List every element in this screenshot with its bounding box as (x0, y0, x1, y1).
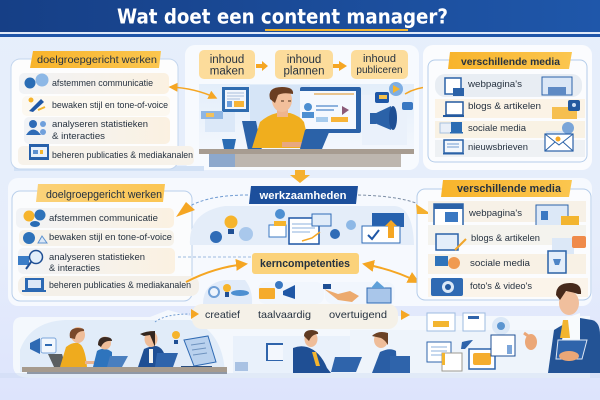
list row: webpagina's (435, 74, 582, 97)
people: team at table (48, 327, 216, 368)
skills pill (191, 304, 410, 329)
desk (199, 149, 414, 167)
monitor (300, 87, 361, 133)
arrow: two-way kerncompetenties and media (364, 264, 418, 282)
list row: afstemmen communicatie (19, 73, 169, 94)
arrow to media (405, 87, 437, 94)
heading: doelgroepgericht werken (36, 184, 165, 202)
panel: workflow and manager scene (185, 45, 437, 170)
list row: foto's & video's: foto's & video's (470, 281, 532, 292)
list row: foto's & video's (428, 278, 588, 297)
panel: verschillende media (top) (423, 45, 592, 170)
step: inhoud plannen: inhoud (287, 54, 321, 66)
arrow: two-way between list and scene (170, 87, 216, 98)
list row: nieuwsbrieven: nieuwsbrieven (468, 142, 528, 153)
arrow (333, 61, 347, 71)
panel: doelgroepgericht werken (top) (11, 51, 204, 171)
list row: blogs (428, 225, 586, 258)
arrow (256, 61, 268, 71)
heading: werkzaamheden (249, 186, 358, 204)
icons: kerncompetenties illustration (203, 280, 395, 304)
list row: sociale media (428, 251, 586, 274)
list row: bewaken stijl: bewaken stijl en tone-of-voice (49, 232, 172, 243)
skills pill: overtuigend (329, 309, 387, 321)
panel: middle section background (8, 178, 592, 306)
step: inhoud maken: inhoud (210, 54, 244, 66)
list row: sociale media (435, 121, 585, 138)
heading: werkzaamheden: werkzaamheden (258, 190, 347, 202)
cup (222, 139, 236, 149)
heading: verschillende media: verschillende media (457, 183, 562, 195)
list row: afstemmen communicatie: afstemmen communicatie (49, 213, 158, 224)
list row: sociale media: sociale media (468, 123, 527, 134)
list row: nieuwsbrieven (435, 140, 585, 157)
skills pill: taalvaardig (258, 309, 311, 321)
document card (222, 87, 249, 112)
heading: verschillende media (448, 52, 572, 69)
social icons: megaphone and likes (370, 82, 413, 130)
icon: key card (30, 338, 56, 354)
panel: bottom scene (0, 283, 600, 378)
list row: webpagina's: webpagina's (468, 208, 522, 219)
list row: analyseren (18, 248, 175, 274)
small chart card (201, 111, 223, 119)
arrow head into panel (416, 204, 431, 214)
illustration: werkzaamheden (190, 206, 414, 245)
list row: beheren (18, 276, 199, 296)
heading: doelgroepgericht werken: doelgroepgericht werken (46, 189, 162, 201)
panel: verschillende media (middle) (416, 180, 591, 300)
header banner (0, 0, 600, 37)
person: presenter with tablet (524, 283, 600, 373)
step: inhoud plannen (275, 50, 333, 79)
dashed connector: werkzaamheden to media (358, 195, 425, 207)
list row: webpagina's: webpagina's (467, 79, 522, 90)
list row: bewaken stijl: bewaken stijl en tone-of-voice (52, 100, 168, 111)
list row: blogs: blogs & artikelen (468, 101, 541, 112)
title: Wat doet een content manager? (117, 4, 448, 28)
people: two colleagues at laptop (235, 330, 410, 373)
list row: bewaken stijl (19, 230, 174, 246)
list row: analyseren: analyseren statistieken (52, 119, 148, 130)
list row: afstemmen communicatie (16, 208, 174, 228)
list row: beheren (18, 144, 194, 165)
step: inhoud publiceren: publiceren (356, 65, 403, 76)
person: content manager (252, 87, 330, 149)
list row: sociale media: sociale media (470, 258, 531, 269)
arrow: creatief pill dashed connector (155, 314, 190, 322)
step: inhoud maken: maken (210, 66, 244, 78)
chair (242, 121, 262, 150)
heading: kerncompetenties (252, 253, 359, 274)
list row: webpagina's (428, 201, 586, 229)
step: inhoud publiceren (351, 50, 408, 79)
step: inhoud maken (199, 50, 255, 79)
dashed connector: list to kerncompetenties (178, 256, 252, 258)
heading: verschillende media: verschillende media (461, 56, 560, 68)
heading: kerncompetenties: kerncompetenties (260, 258, 350, 270)
step: inhoud publiceren: inhoud (363, 53, 396, 65)
desk (22, 367, 227, 374)
list row: beheren: beheren publicaties & mediakanalen (49, 280, 191, 291)
list row: afstemmen communicatie: afstemmen communicatie (52, 78, 153, 89)
panel: doelgroepgericht werken (middle) (12, 184, 199, 301)
skills pill: creatief (205, 309, 240, 321)
list row: analyseren: analyseren statistieken (49, 252, 145, 263)
list row: bewaken stijl (22, 96, 170, 116)
step: inhoud plannen: plannen (284, 66, 324, 78)
cards and documents (427, 313, 515, 371)
arrow: beheren to kerncompetenties (186, 264, 246, 282)
heading: doelgroepgericht werken: doelgroepgericht werken (37, 54, 157, 66)
list row: analyseren: & interacties (52, 131, 105, 142)
list row: analyseren (24, 117, 170, 144)
heading: doelgroepgericht werken (30, 51, 161, 68)
list row: blogs (435, 99, 585, 119)
list row: beheren: beheren publicaties & mediakanalen (52, 150, 193, 161)
arrow: werkzaamheden to list (176, 195, 248, 217)
heading: verschillende media (441, 180, 572, 197)
list row: analyseren: & interacties (49, 263, 100, 274)
icon: envelope (545, 122, 574, 151)
list row: blogs: blogs & artikelen (471, 233, 540, 244)
arrow: down between sections (290, 170, 310, 183)
